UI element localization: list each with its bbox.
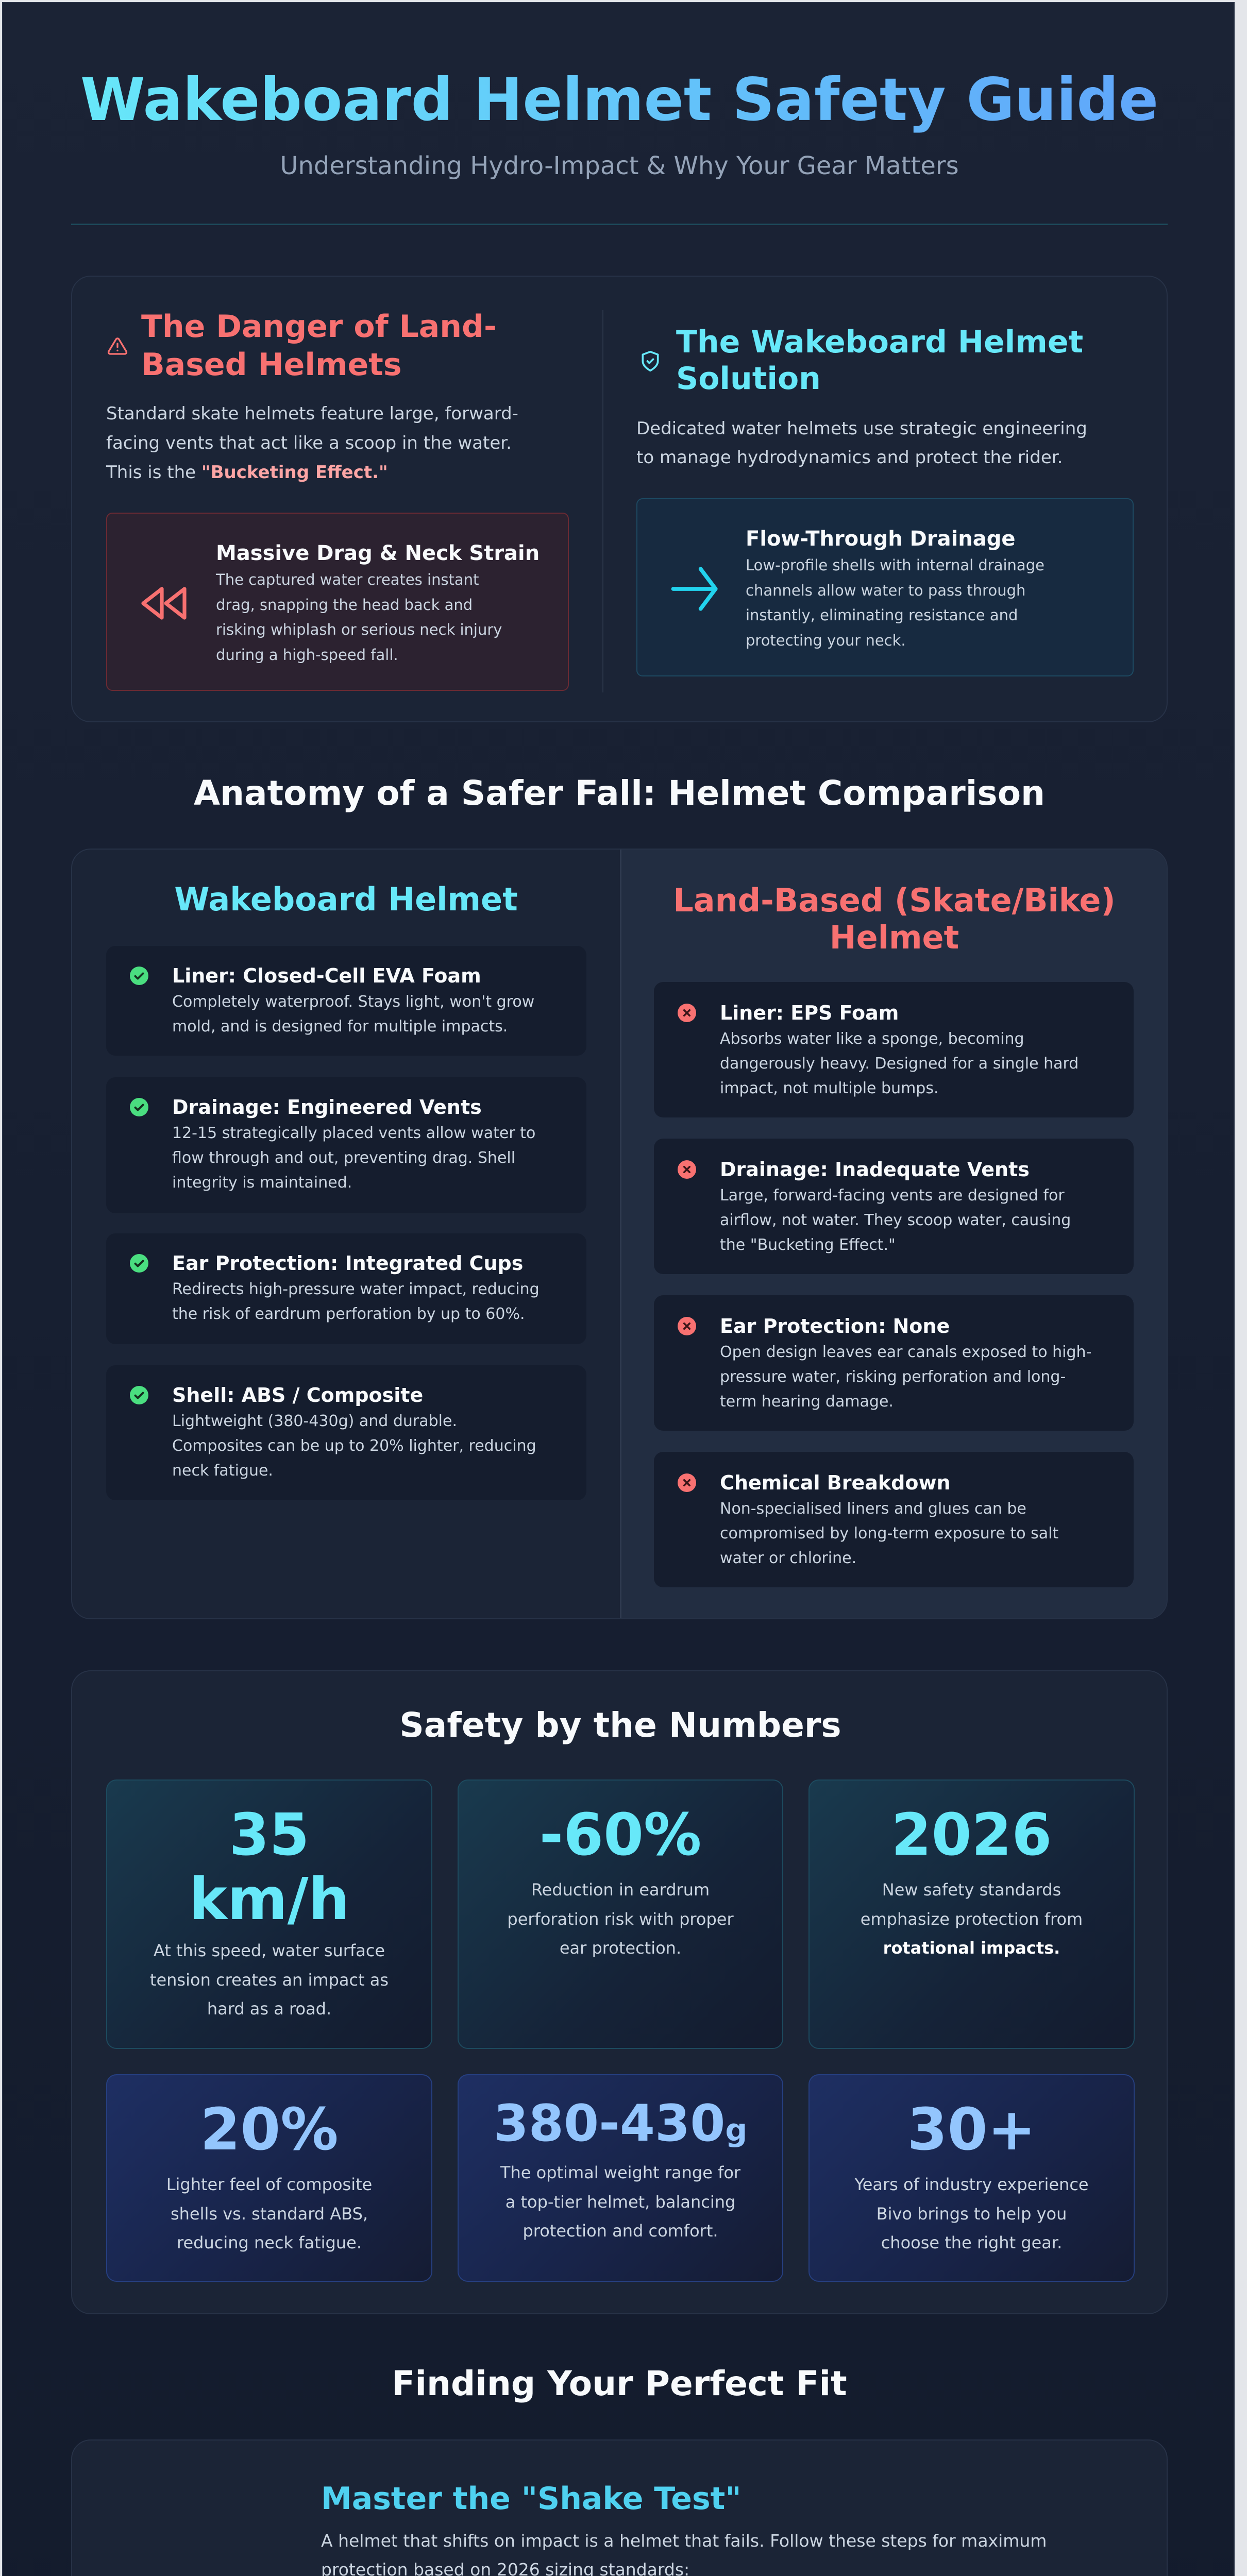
stat: 35 km/h	[106, 1780, 432, 2049]
stat: 30+: 30+	[907, 2096, 1036, 2163]
stat: -60%: ear protection.	[560, 1938, 681, 1958]
card: ear none: term hearing damage.	[720, 1393, 894, 1411]
card: ear none	[654, 1295, 1134, 1431]
card: shell: Composites can be up to 20% lighter, reducing	[172, 1437, 536, 1455]
card: inadequate vents: airflow, not water. They scoop water, causing	[720, 1211, 1071, 1229]
text: danger intro: This is the "Bucketing Effect."	[106, 462, 388, 483]
icon: check	[130, 1254, 148, 1273]
stat: 20%: Lighter feel of composite	[166, 2175, 372, 2194]
stat: 2026	[808, 1780, 1135, 2049]
panel: safety by numbers	[71, 1670, 1168, 2314]
heading: wakeboard column: Wakeboard Helmet	[174, 880, 518, 918]
callout text	[215, 571, 502, 664]
heading: land-based column: Land-Based (Skate/Bike)	[673, 882, 1116, 919]
card: EPS	[654, 982, 1134, 1117]
panel: comparison	[71, 849, 1168, 1619]
stat: 35 km/h: km/h	[189, 1866, 349, 1933]
stat: 380-430g: protection and comfort.	[523, 2221, 718, 2241]
stat: 30+	[808, 2074, 1135, 2282]
subtitle: Understanding Hydro-Impact & Why Your Gear Matters	[280, 151, 959, 180]
heading: land-based column: Helmet	[830, 919, 959, 956]
panel: shake test	[71, 2439, 1168, 2576]
stat: 30+: Years of industry experience	[854, 2175, 1089, 2194]
card: drainage engineered: Drainage: Engineered Vents	[172, 1096, 482, 1118]
card: liner EVA	[106, 946, 586, 1056]
icon: warning	[107, 337, 128, 355]
card: EPS: dangerously heavy. Designed for a single hard	[720, 1055, 1079, 1073]
card: liner EVA: mold, and is designed for multiple impacts.	[172, 1018, 508, 1036]
card: ear protection: Redirects high-pressure water impact, reducing	[172, 1280, 540, 1298]
heading: danger: Based Helmets	[141, 347, 402, 383]
stat: 2026: 2026	[891, 1802, 1052, 1869]
card: ear protection: Ear Protection: Integrated Cups	[172, 1252, 523, 1275]
card: inadequate vents: Drainage: Inadequate Vents	[720, 1158, 1030, 1181]
text: solution intro: Dedicated water helmets use strategic engineering	[636, 418, 1087, 439]
card: drainage engineered: integrity is maintained.	[172, 1174, 352, 1192]
callout text	[746, 556, 1044, 649]
icon: check	[130, 1386, 148, 1404]
heading: solution: Solution	[676, 361, 821, 397]
card: liner EVA: Completely waterproof. Stays light, won't grow	[172, 993, 534, 1011]
card: shell: Lightweight (380-430g) and durable.	[172, 1412, 457, 1430]
icon: shake test	[121, 2568, 291, 2576]
callout text: channels allow water to pass through	[746, 581, 1025, 599]
callout text: The captured water creates instant	[216, 571, 479, 588]
callout text: Low-profile shells with internal drainage	[746, 556, 1044, 574]
callout text: protecting your neck.	[746, 632, 906, 649]
card: ear none: Ear Protection: None	[720, 1315, 950, 1337]
icon: check	[130, 967, 148, 985]
stat: -60%: perforation risk with proper	[507, 1909, 734, 1929]
card: liner EVA: Liner: Closed-Cell EVA Foam	[172, 964, 481, 987]
card: EPS: impact, not multiple bumps.	[720, 1079, 939, 1097]
stat: 20%: shells vs. standard ABS,	[171, 2204, 368, 2224]
callout title: Massive Drag & Neck Strain	[216, 541, 540, 565]
card: chemical: compromised by long-term exposure to salt	[720, 1524, 1058, 1543]
stat: -60%: Reduction in eardrum	[531, 1880, 710, 1900]
icon: rewind	[141, 587, 187, 620]
callout text: risking whiplash or serious neck injury	[216, 621, 502, 638]
heading: perfect fit: Finding Your Perfect Fit	[392, 2364, 847, 2403]
card: ear protection	[106, 1233, 586, 1344]
heading: anatomy: Anatomy of a Safer Fall: Helmet Comparison	[194, 773, 1045, 813]
card: shell	[106, 1365, 586, 1500]
stat: 35 km/h: tension creates an impact as	[150, 1970, 389, 1990]
stat: 2026: New safety standards	[882, 1880, 1061, 1900]
callout: massive drag	[106, 513, 569, 691]
callout text: during a high-speed fall.	[216, 646, 398, 664]
stat: 20%	[106, 2074, 432, 2282]
card: EPS: Liner: EPS Foam	[720, 1002, 899, 1024]
stat: -60%: -60%	[540, 1802, 701, 1869]
icon: shield	[642, 350, 659, 372]
icon: x	[678, 1473, 696, 1492]
heading: danger: The Danger of Land-	[141, 309, 497, 345]
stat: 2026: rotational impacts.	[883, 1938, 1060, 1958]
stat: 35 km/h: At this speed, water surface	[154, 1941, 385, 1960]
card: inadequate vents: the "Bucketing Effect."	[720, 1236, 896, 1254]
panel: danger vs solution	[71, 276, 1168, 722]
stat: 380-430g: 380-430g	[494, 2094, 747, 2153]
card: chemical	[654, 1452, 1134, 1587]
callout text: drag, snapping the head back and	[216, 596, 473, 613]
heading: land-based column	[673, 882, 1116, 956]
text: danger intro: Standard skate helmets feature large, forward-	[106, 403, 518, 424]
stat: -60%	[458, 1780, 783, 2049]
card: chemical: water or chlorine.	[720, 1549, 856, 1567]
stat: 35 km/h: 35	[229, 1802, 309, 1869]
text: intro	[321, 2527, 1047, 2576]
stat: 20%: reducing neck fatigue.	[177, 2233, 362, 2252]
text: solution intro: to manage hydrodynamics and protect the rider.	[636, 447, 1063, 468]
stat: 380-430g: The optimal weight range for	[500, 2163, 740, 2182]
card: shell: neck fatigue.	[172, 1462, 273, 1480]
title: Wakeboard Helmet Safety Guide	[80, 65, 1158, 134]
card: shell: Shell: ABS / Composite	[172, 1384, 423, 1406]
card: chemical: Chemical Breakdown	[720, 1471, 951, 1494]
icon: arrow	[671, 567, 718, 611]
text: danger intro	[106, 403, 518, 483]
card: inadequate vents: Large, forward-facing vents are designed for	[720, 1187, 1065, 1205]
stat: 35 km/h: hard as a road.	[207, 1999, 331, 2019]
stat: 2026: emphasize protection from	[861, 1909, 1083, 1929]
icon: check	[130, 1098, 148, 1116]
card: chemical: Non-specialised liners and glues can be	[720, 1500, 1026, 1518]
text: danger intro: facing vents that act like a scoop in the water.	[106, 433, 512, 453]
card: ear none: pressure water, risking perforation and long-	[720, 1368, 1066, 1386]
card: ear none: Open design leaves ear canals exposed to high-	[720, 1343, 1091, 1361]
callout title: Flow-Through Drainage	[746, 527, 1016, 551]
stat: 30+: Bivo brings to help you	[877, 2204, 1067, 2224]
callout text: instantly, eliminating resistance and	[746, 606, 1018, 624]
icon: x	[678, 1160, 696, 1179]
heading: solution	[676, 324, 1083, 397]
icon: x	[678, 1004, 696, 1022]
card: drainage engineered: 12-15 strategically placed vents allow water to	[172, 1124, 535, 1142]
callout: flow-through	[636, 498, 1134, 676]
stat: 20%: 20%	[200, 2096, 339, 2163]
icon: x	[678, 1317, 696, 1335]
text: solution intro	[636, 418, 1087, 468]
text: intro: A helmet that shifts on impact is a helmet that fails. Follow these steps for maximum	[321, 2531, 1047, 2551]
card: drainage engineered: flow through and out, preventing drag. Shell	[172, 1149, 515, 1167]
heading: shake test: Master the "Shake Test"	[321, 2481, 742, 2517]
card: EPS: Absorbs water like a sponge, becoming	[720, 1030, 1024, 1048]
stat: 380-430g: a top-tier helmet, balancing	[505, 2192, 735, 2211]
heading: solution: The Wakeboard Helmet	[676, 324, 1083, 360]
stat: 380-430g	[458, 2074, 783, 2282]
heading: numbers: Safety by the Numbers	[399, 1705, 841, 1745]
card: drainage engineered	[106, 1077, 586, 1213]
stat: 30+: choose the right gear.	[881, 2233, 1062, 2252]
card: inadequate vents	[654, 1139, 1134, 1274]
card: ear protection: the risk of eardrum perforation by up to 60%.	[172, 1305, 525, 1323]
heading: danger	[141, 309, 497, 383]
